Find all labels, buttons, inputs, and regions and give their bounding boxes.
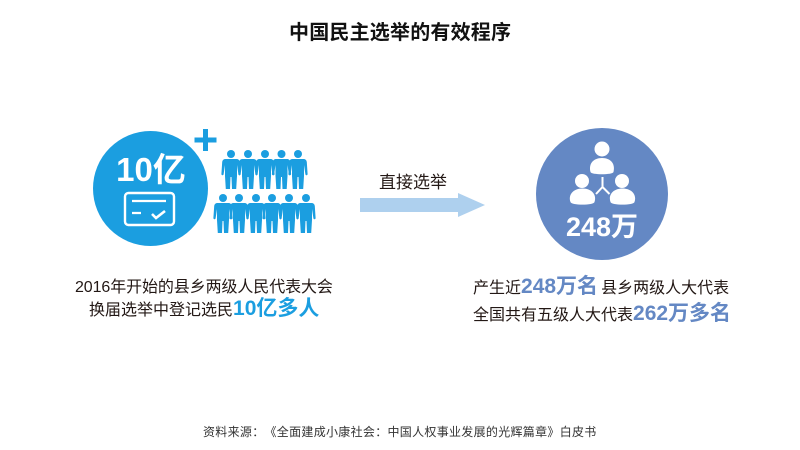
text block: left caption bbox=[75, 278, 333, 320]
text block: right caption: 全国共有五级人大代表262万多名 bbox=[473, 302, 731, 325]
icon: representatives circle with 248万: 248万 bbox=[566, 212, 638, 242]
text block: right caption bbox=[473, 274, 731, 325]
text block: left caption: 2016年开始的县乡两级人民代表大会 bbox=[75, 279, 333, 296]
text block: left caption: 换届选举中登记选民10亿多人 bbox=[89, 297, 319, 320]
arrow bbox=[360, 193, 485, 217]
text block: right caption: 产生近248万名县乡两级人大代表 bbox=[473, 275, 729, 298]
arrow label: 直接选举 bbox=[379, 173, 447, 192]
icon: crowd of people bbox=[213, 150, 316, 233]
icon: voter circle with 10亿 and ballot card bbox=[93, 131, 208, 246]
icon: plus sign bbox=[194, 129, 216, 151]
source note: 资料来源：《全面建成小康社会：中国人权事业发展的光辉篇章》白皮书 bbox=[203, 425, 597, 439]
icon: representatives circle with 248万 bbox=[536, 128, 668, 260]
title: 中国民主选举的有效程序 bbox=[289, 22, 511, 44]
icon: voter circle with 10亿 and ballot card: 10亿 bbox=[116, 151, 186, 188]
